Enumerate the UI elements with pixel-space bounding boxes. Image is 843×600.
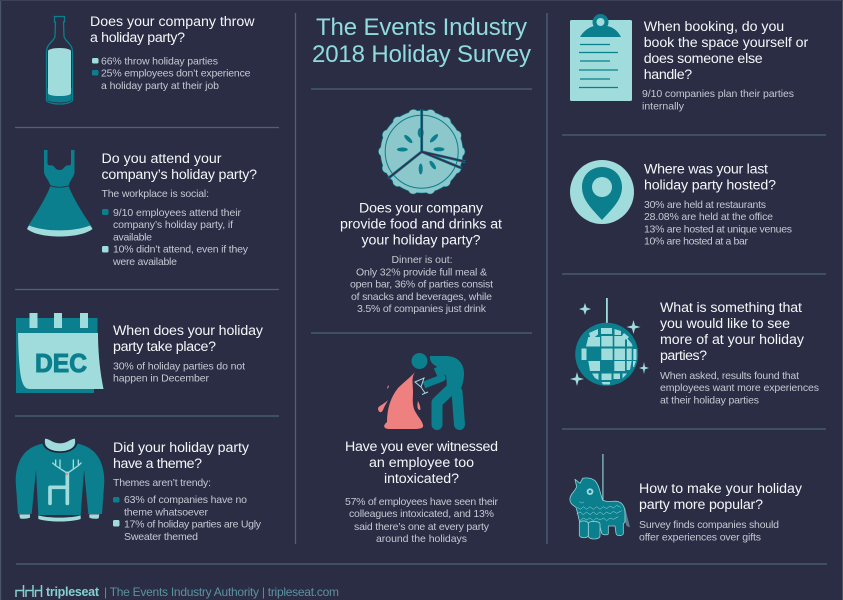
heading xyxy=(102,151,257,183)
body text xyxy=(345,496,498,545)
heading: Did your holiday party xyxy=(113,440,250,456)
title: The Events Industry xyxy=(316,14,527,41)
panel: party theme xyxy=(16,439,262,543)
bullet list: were available xyxy=(112,256,177,268)
body text: said there’s one at every party xyxy=(354,521,490,533)
panel: more popular xyxy=(570,454,803,544)
body text xyxy=(113,360,245,384)
heading: Does your company xyxy=(359,200,484,216)
heading: intoxicated? xyxy=(384,471,459,487)
heading: party more popular? xyxy=(639,497,763,513)
body text xyxy=(350,254,493,315)
heading xyxy=(345,439,498,487)
heading xyxy=(113,323,264,355)
bullet list: 63% of companies have no xyxy=(124,494,247,506)
heading xyxy=(90,14,255,46)
icon: sick person xyxy=(378,353,464,429)
bullet list: company’s holiday party, if xyxy=(113,219,233,231)
body text: 3.5% of companies just drink xyxy=(357,303,487,315)
bullet list: 9/10 employees attend their xyxy=(113,207,242,219)
bullet list: 17% of holiday parties are Ugly xyxy=(124,518,262,530)
body text: 57% of employees have seen their xyxy=(345,496,498,508)
body text: internally xyxy=(642,100,685,112)
body text: 13% are hosted at unique venues xyxy=(644,224,792,236)
heading xyxy=(639,481,803,513)
panel: food and drinks xyxy=(340,109,502,315)
footer tagline: | The Events Industry Authority | tripleseat.com xyxy=(104,585,339,599)
intro text: The workplace is social: xyxy=(102,188,209,200)
heading: an employee too xyxy=(369,455,474,471)
body text: offer experiences over gifts xyxy=(639,532,761,544)
heading xyxy=(340,200,502,248)
heading: holiday party hosted? xyxy=(644,178,776,194)
heading xyxy=(644,19,808,83)
bullet list: 66% throw holiday parties xyxy=(101,56,218,68)
body text: Dinner is out: xyxy=(392,254,452,266)
heading: How to make your holiday xyxy=(639,481,803,497)
heading: have a theme? xyxy=(113,456,202,472)
heading: does someone else xyxy=(644,51,763,67)
body text: 9/10 companies plan their parties xyxy=(642,88,794,100)
panel: booking xyxy=(570,16,808,112)
bullet list: available xyxy=(113,232,152,244)
body text: 10% are hosted at a bar xyxy=(644,236,748,248)
bullet list: theme whatsoever xyxy=(124,506,208,518)
heading xyxy=(113,440,250,472)
body text: Survey finds companies should xyxy=(639,519,779,531)
heading: parties? xyxy=(660,348,707,364)
intro text: Themes aren’t trendy: xyxy=(113,477,211,489)
body text: 30% are held at restaurants xyxy=(644,199,766,211)
body text: employees want more experiences xyxy=(660,382,819,394)
heading: handle? xyxy=(644,67,692,83)
body text xyxy=(660,370,819,406)
heading: What is something that xyxy=(660,300,802,316)
body text: open bar, 36% of parties consist xyxy=(350,278,493,290)
body text: happen in December xyxy=(113,372,210,384)
heading: Have you ever witnessed xyxy=(345,439,498,455)
icon: dress xyxy=(27,150,92,236)
body text xyxy=(642,88,794,112)
panel: when party takes place xyxy=(16,313,264,393)
body text xyxy=(639,519,779,544)
panel: last party location xyxy=(570,160,792,248)
icon: disco ball xyxy=(570,298,649,386)
heading: book the space yourself or xyxy=(644,35,808,51)
heading: more of at your holiday xyxy=(660,332,805,348)
body text: 28.08% are held at the office xyxy=(644,211,773,223)
logo wordmark: tripleseat xyxy=(46,585,100,599)
body text: around the holidays xyxy=(376,533,467,545)
body text: 30% of holiday parties do not xyxy=(113,360,245,372)
bullet list: a holiday party at their job xyxy=(101,80,219,92)
bullet list xyxy=(102,207,249,268)
heading: Where was your last xyxy=(644,162,768,178)
icon: clipboard xyxy=(570,16,632,101)
heading: Do you attend your xyxy=(102,151,222,167)
heading: a holiday party? xyxy=(90,30,185,46)
heading xyxy=(644,162,776,194)
panel: intoxicated employee xyxy=(345,353,498,545)
heading: When booking, do you xyxy=(644,19,784,35)
panel: attend holiday party xyxy=(27,150,257,268)
body text: Only 32% provide full meal & xyxy=(356,266,487,278)
icon: ugly sweater xyxy=(16,439,104,521)
bullet list: 25% employees don’t experience xyxy=(101,68,251,80)
body text: of snacks and beverages, while xyxy=(351,291,492,303)
body text: colleagues intoxicated, and 13% xyxy=(349,508,494,520)
icon: bottle xyxy=(46,16,72,104)
heading: company’s holiday party? xyxy=(102,167,257,183)
heading: your holiday party? xyxy=(362,232,481,248)
title: 2018 Holiday Survey xyxy=(312,41,531,68)
icon: December calendar xyxy=(16,313,104,393)
bullet list xyxy=(92,56,251,92)
title xyxy=(312,14,531,68)
icon: pinata xyxy=(570,454,630,539)
heading: Does your company throw xyxy=(90,14,255,30)
icon: location pin xyxy=(570,160,634,224)
bullet list xyxy=(113,494,262,543)
heading: When does your holiday xyxy=(113,323,264,339)
body text xyxy=(644,199,792,248)
footer xyxy=(16,585,339,599)
heading: party take place? xyxy=(113,339,216,355)
heading: provide food and drinks at xyxy=(340,216,502,232)
body text: at their holiday parties xyxy=(660,394,759,406)
icon: tripleseat logo xyxy=(16,585,42,597)
body text: When asked, results found that xyxy=(660,370,799,382)
panel: want more of xyxy=(570,298,819,406)
bullet list: Sweater themed xyxy=(124,531,198,543)
heading xyxy=(660,300,805,364)
icon: December calendar: DEC xyxy=(35,348,87,378)
heading: you would like to see xyxy=(660,316,790,332)
bullet list: 10% didn’t attend, even if they xyxy=(113,244,249,256)
panel: holiday party bottle xyxy=(46,14,255,104)
icon: pie xyxy=(380,109,466,193)
